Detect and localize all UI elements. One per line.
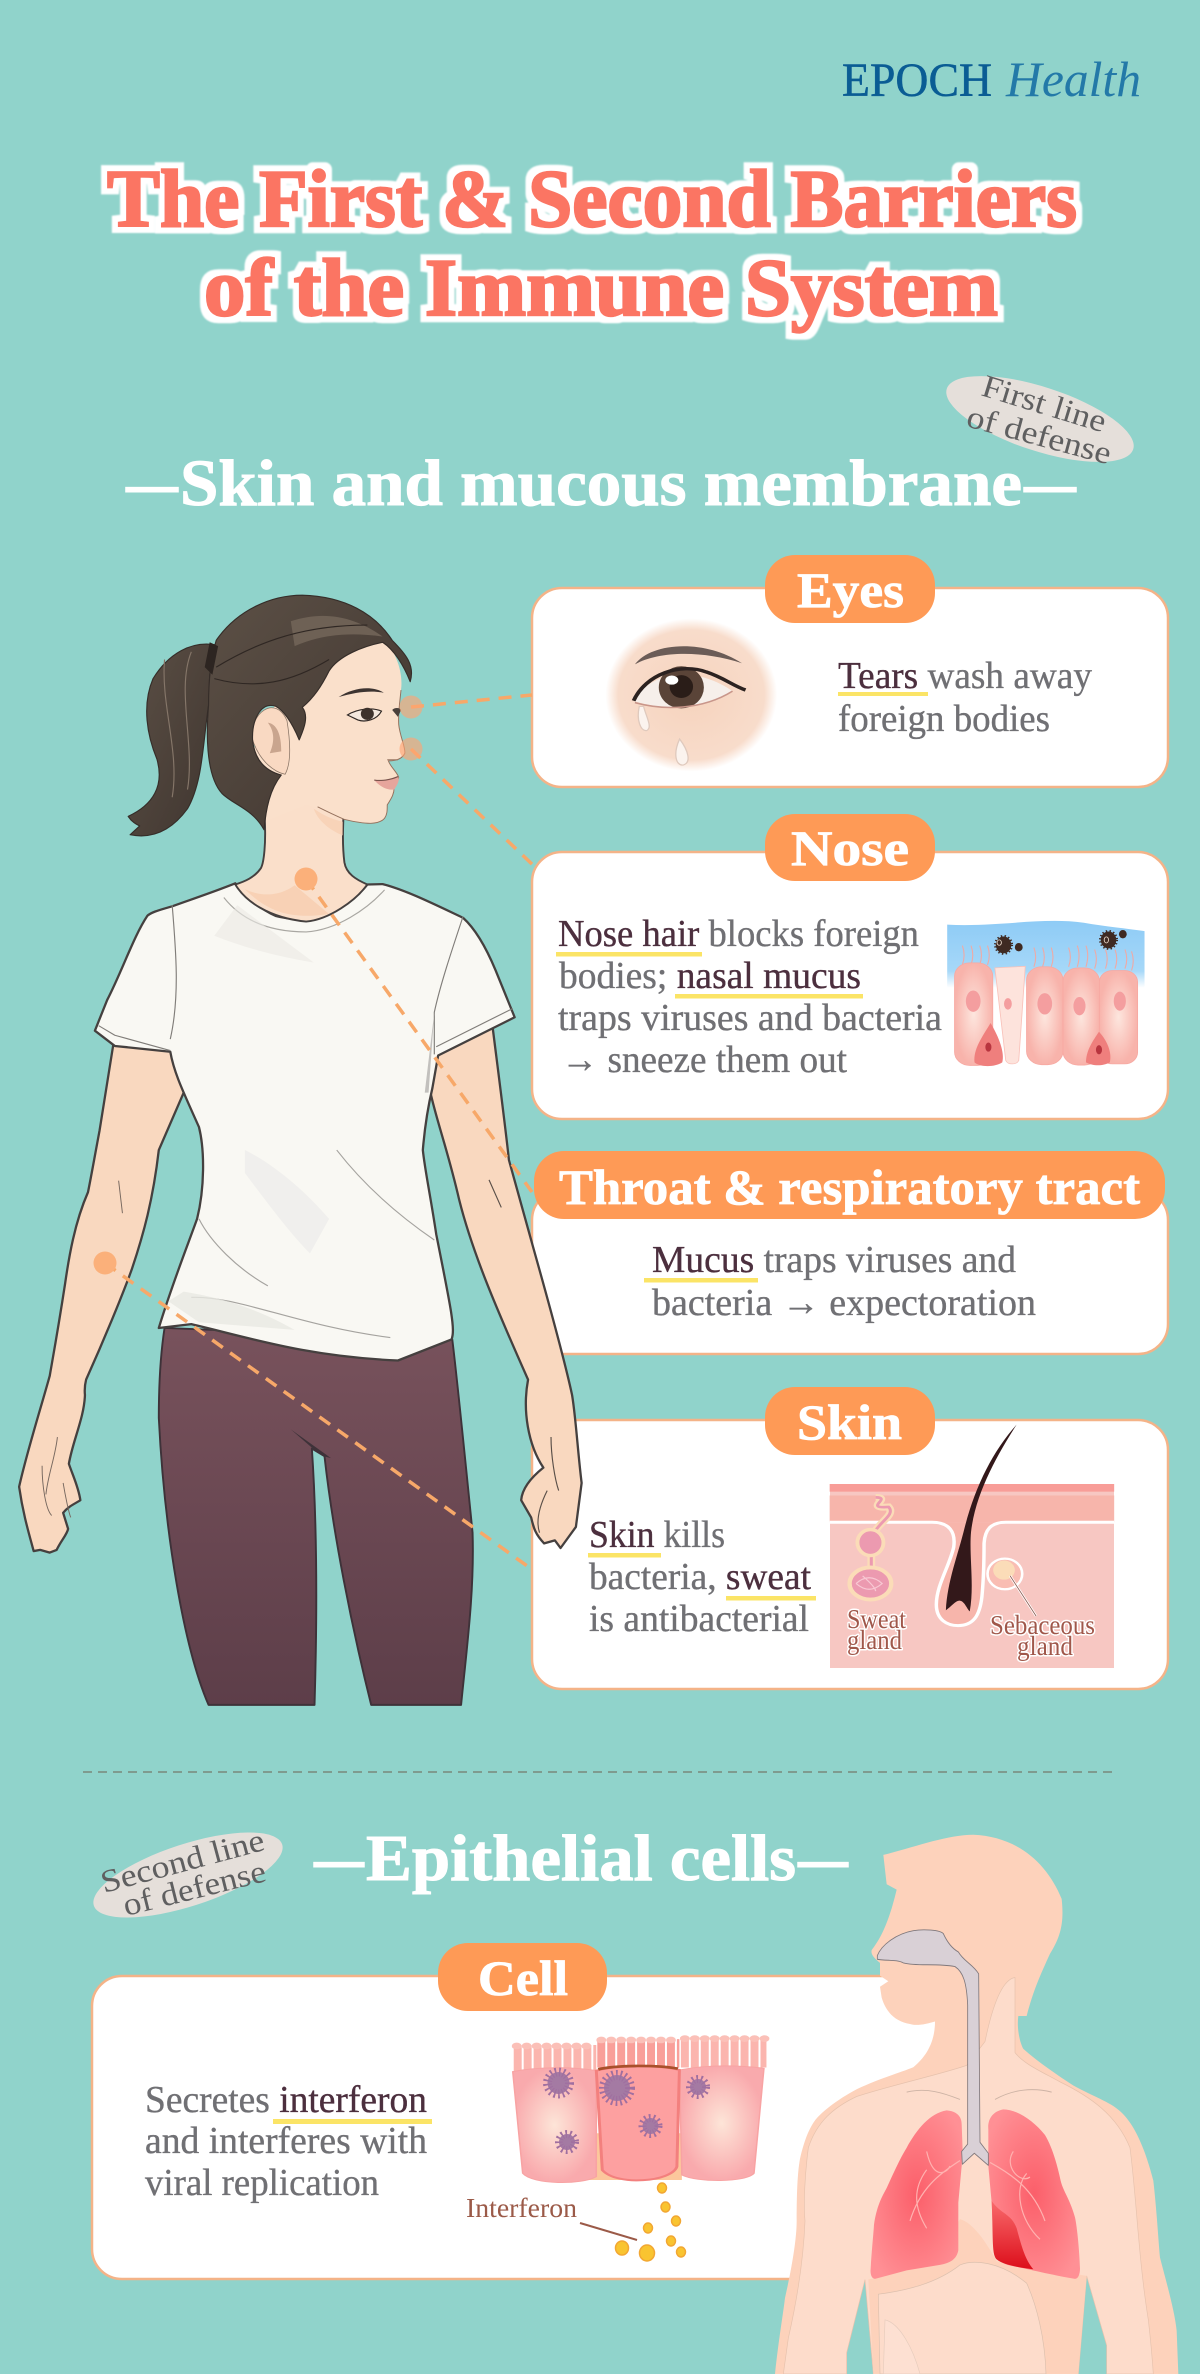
callout line: throat [294,868,532,1192]
label: skin [765,1387,935,1455]
heading: epithelial cells: — [313,1822,365,1895]
marker: eye [400,696,422,718]
text: skin: Skin kills [589,1514,725,1556]
label: cell [438,1943,607,2011]
heading: skin and mucous membrane: — [1023,447,1077,520]
label: eyes: Eyes [797,562,904,618]
icon: eye with tears [605,618,777,772]
heading: epithelial cells: Epithelial cells [366,1822,796,1895]
label: cell: Cell [478,1950,568,2006]
marker: throat [294,868,318,890]
text: cell: viral replication [145,2162,379,2204]
label: skin: Skin [797,1394,902,1450]
text: skin [588,1514,816,1640]
text: nose: bodies; nasal mucus [559,955,861,997]
badge: second line of defense: of defense [119,1853,269,1923]
text: skin: bacteria, sweat [589,1556,811,1598]
text: cell: Secretes interferon [145,2079,427,2121]
chart: skin cross-section [830,1425,1114,1668]
panel: cell [92,1943,992,2279]
marker: arm [94,1252,116,1274]
badge: second line of defense [84,1815,292,1935]
icon: nasal epithelium [947,921,1145,1066]
left arm [19,1035,184,1553]
logo: EPOCH Health [842,51,1141,107]
label: interferon [466,2193,637,2240]
body silhouette [775,1835,1178,2374]
badge: first line of defense: of defense [963,398,1115,471]
label: eyes [765,555,935,623]
badge: first line of defense: First line [978,367,1111,439]
callout line: nose [400,738,534,866]
interferon dots [616,2183,686,2261]
right arm [430,1020,582,1548]
text: skin: is antibacterial [589,1598,809,1640]
label: interferon: Interferon [466,2193,578,2223]
callout line: eyes [400,695,532,718]
face details [339,688,384,697]
label: nose: Nose [791,820,909,876]
illustration: respiratory system [775,1835,1178,2374]
hair [207,595,412,830]
text: nose: traps viruses and bacteria [558,997,942,1039]
marker: nose [400,738,422,760]
shirt [95,883,515,1361]
text: tears: foreign bodies [838,698,1050,740]
text: nose: Nose hair blocks foreign [558,913,919,955]
text: cell: and interferes with [145,2120,427,2162]
panel: eyes [532,555,1168,787]
heading: skin and mucous membrane: Skin and mucous membrane [180,447,1022,520]
logo: EPOCH Health: EPOCH [842,54,992,107]
title: The First & Second Barriers [107,153,1077,244]
text: cell [145,2079,432,2204]
ear [252,708,290,774]
heading: skin and mucous membrane: — [125,447,179,520]
panel: throat and respiratory tract [532,1151,1168,1354]
title: of the Immune System [204,242,998,333]
lower body and arms [19,883,582,1705]
label: sweat gland: Sweat [847,1604,906,1634]
label: sebaceous gland: Sebaceous [990,1610,1095,1640]
ponytail [128,644,216,836]
badge: first line of defense [937,358,1143,480]
label: nose [765,814,935,881]
label: sebaceous gland [990,1610,1095,1661]
illustration: woman [19,595,582,1705]
head [253,602,405,823]
torso lighter layer [783,1978,1153,2374]
heart [992,2201,1033,2269]
heading: epithelial cells: — [797,1822,849,1895]
label: sweat gland [847,1604,906,1655]
label: sweat gland: gland [847,1625,902,1655]
text: tears: Tears wash away [838,655,1092,697]
airway [877,1930,988,2165]
panel: nose [532,814,1168,1119]
text: throat: Mucus traps viruses and [652,1239,1016,1281]
logo: EPOCH Health: Health [1005,51,1141,107]
text: throat: bacteria → expectoration [652,1282,1036,1324]
label: throat and respiratory tract: Throat & respiratory tract [559,1159,1140,1215]
text: throat [644,1239,1036,1324]
label: sebaceous gland: gland [1017,1631,1073,1661]
neck [235,797,367,922]
lungs [871,2110,963,2279]
title [107,153,1077,333]
panel: skin [532,1387,1168,1689]
badge: second line of defense: Second line [96,1822,268,1900]
icon: epithelial cells [513,2039,766,2183]
text: tears [838,655,1092,740]
text: nose: → sneeze them out [561,1039,847,1081]
callout line: skin [94,1252,530,1568]
leggings [159,1328,473,1705]
text: nose [556,913,942,1081]
